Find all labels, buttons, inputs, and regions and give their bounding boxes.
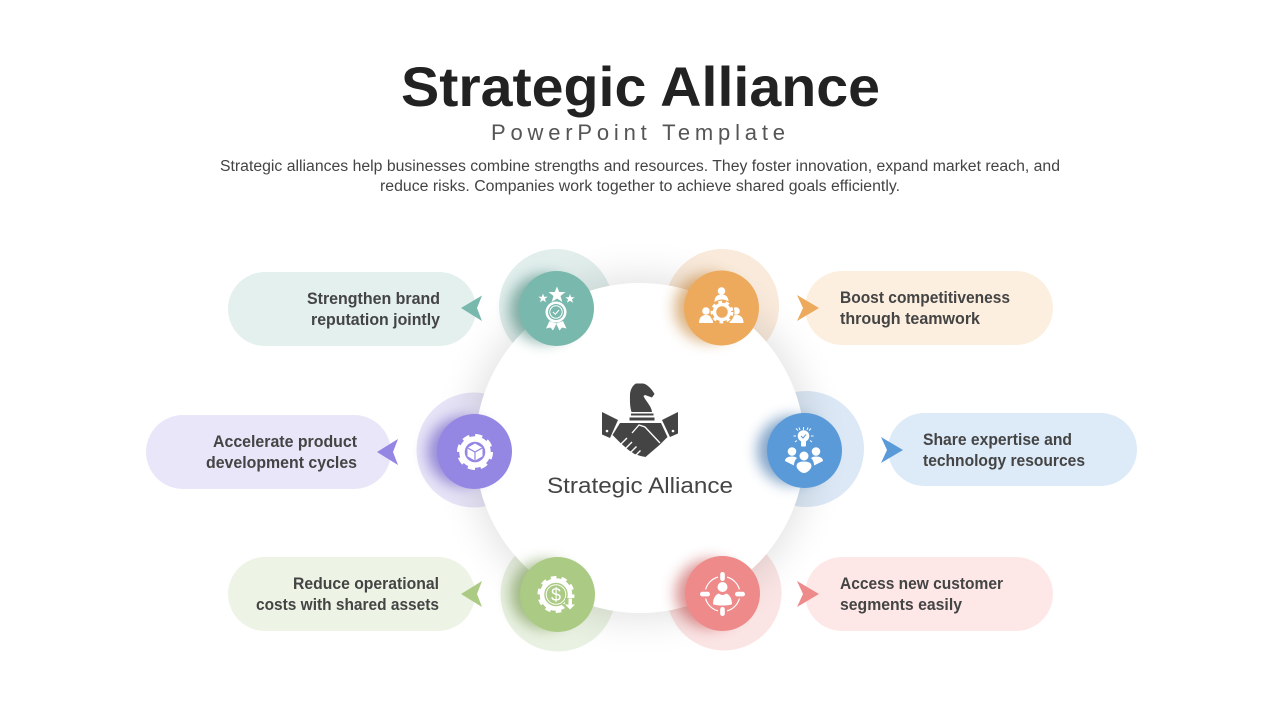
- icon circle: product development: [428, 414, 512, 489]
- pill: reputation: Strengthen brand: [307, 290, 440, 308]
- pill: competitiveness: Boost competitiveness: [840, 289, 1010, 307]
- icon circle: shared assets: [510, 557, 595, 632]
- arrow: customer segments: [797, 581, 819, 607]
- pill: reputation: reputation jointly: [311, 311, 441, 329]
- pill: expertise: technology resources: [923, 452, 1085, 470]
- pill: shared assets: costs with shared assets: [256, 596, 439, 614]
- pill: customer segments: [805, 557, 1053, 631]
- icon circle: reputation: [510, 271, 594, 346]
- pill: product development: Accelerate product: [213, 433, 357, 451]
- description: Strategic alliances help businesses combine strengths and resources. They foster innovation, expand market reach, and: [220, 158, 1060, 175]
- arrow: expertise: [881, 437, 903, 463]
- title: Strategic Alliance: [401, 55, 880, 118]
- arrow: shared assets: [461, 581, 482, 607]
- center label: Strategic Alliance: [547, 473, 733, 498]
- subtitle: PowerPoint Template: [491, 120, 785, 145]
- pill: product development: development cycles: [206, 454, 357, 472]
- pill: expertise: Share expertise and: [923, 431, 1072, 449]
- icon: knight and handshake: [602, 384, 678, 457]
- pill: shared assets: [228, 557, 475, 631]
- pill: shared assets: Reduce operational: [293, 575, 439, 593]
- pill: reputation: [228, 272, 476, 346]
- halo circles: [416, 249, 864, 652]
- pill: product development: [146, 415, 391, 489]
- icon circle: competitiveness: [674, 270, 759, 346]
- central circle shadow: [470, 278, 810, 618]
- arrow: product development: [377, 439, 398, 465]
- pill: customer segments: Access new customer: [840, 575, 1004, 593]
- arrow: competitiveness: [797, 295, 819, 321]
- pill: competitiveness: through teamwork: [840, 310, 981, 328]
- pill: customer segments: segments easily: [840, 596, 963, 614]
- description: reduce risks. Companies work together to achieve shared goals efficiently.: [380, 178, 900, 195]
- icon circle: expertise: [758, 413, 842, 488]
- pill: competitiveness: [805, 271, 1053, 345]
- pill: expertise: [888, 413, 1137, 486]
- icon circle: shared assets: $: [551, 585, 561, 605]
- arrow: reputation: [461, 296, 482, 321]
- description: [220, 158, 1060, 195]
- central circle: [475, 283, 805, 613]
- icon circle: customer segments: [676, 556, 760, 631]
